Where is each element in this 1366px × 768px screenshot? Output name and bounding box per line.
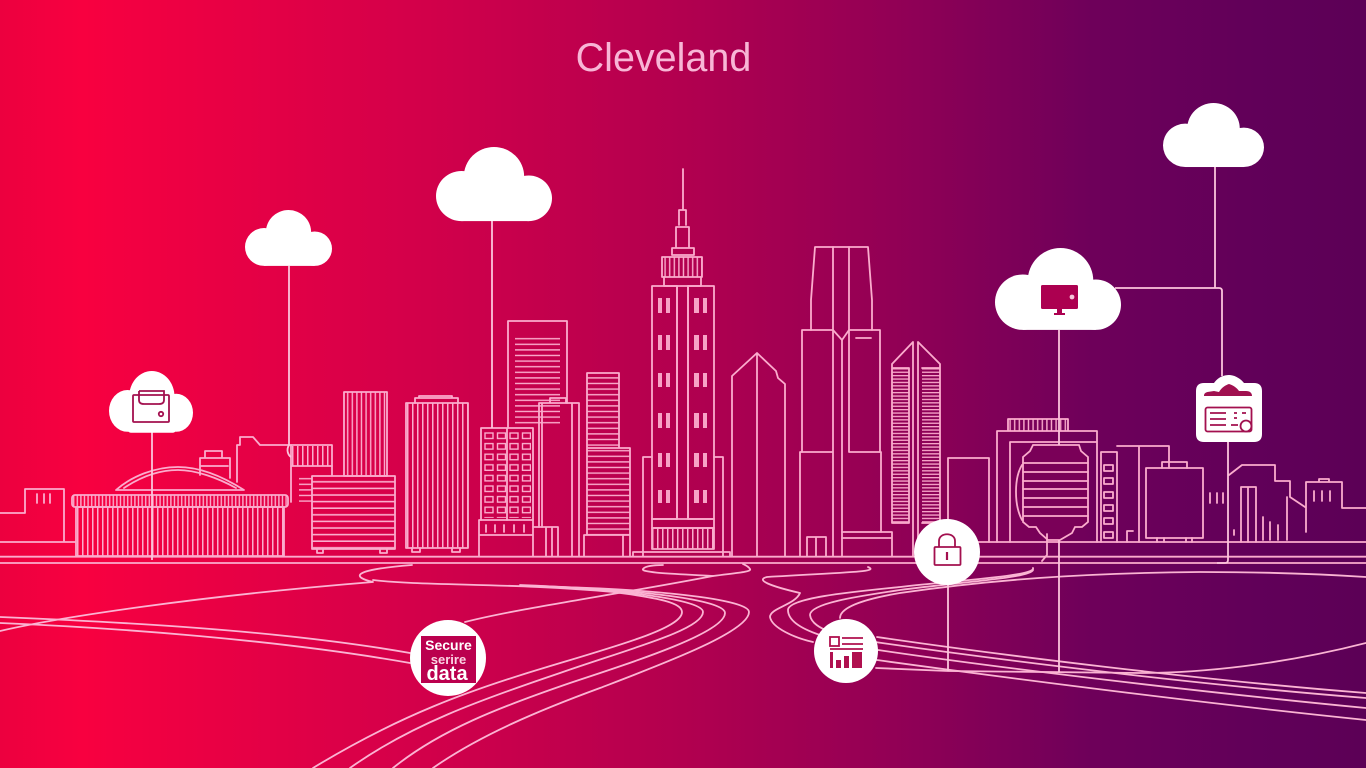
skyline: windowed block and boxy building <box>1101 446 1223 542</box>
skyline: twin peak tower <box>892 342 940 556</box>
secure data label <box>425 637 472 685</box>
icon: padlock <box>934 534 960 565</box>
icon: monitor <box>1041 285 1078 315</box>
card icon badge <box>1196 375 1262 442</box>
icon: bag <box>133 391 169 422</box>
road network <box>0 564 1366 768</box>
skyline: tall ribbed tower <box>406 396 468 552</box>
skyline: central skyscraper with spire <box>633 169 730 556</box>
chart circle <box>814 619 878 683</box>
secure data circle <box>410 620 486 696</box>
skyline: mid-left buildings <box>200 437 332 502</box>
skyline: far-right buildings <box>1229 465 1366 542</box>
cloud 3 <box>436 147 552 221</box>
cloud with bag icon <box>109 371 193 433</box>
secure data label: serire <box>431 652 466 667</box>
lock circle <box>914 519 980 585</box>
connector lines <box>152 167 1228 672</box>
title: Cleveland <box>576 36 751 80</box>
skyline: striped office building <box>508 321 567 428</box>
skyline: stepped striped tower <box>584 373 630 556</box>
skyline: right-hand block <box>948 458 989 542</box>
secure data label: data <box>426 663 468 685</box>
skyline: windowed building <box>479 428 533 556</box>
skyline: pointed building <box>732 353 785 556</box>
cloud with monitor icon <box>995 248 1121 330</box>
skyline: vertical striped tower <box>344 392 387 476</box>
cloud 5 <box>1163 103 1264 167</box>
skyline: octagonal data tower building <box>997 419 1097 561</box>
ground lines <box>0 542 1366 563</box>
skyline: slim tower and podium <box>533 398 579 556</box>
skyline: domed stadium <box>72 467 288 556</box>
secure data label: Secure <box>425 637 472 653</box>
skyline: left low-rise building <box>0 489 75 542</box>
icon: report with bars <box>830 637 863 668</box>
cloud 2 <box>245 210 332 266</box>
skyline: twin-shaft tall tower <box>800 247 892 556</box>
skyline: horizontal striped block <box>312 476 395 553</box>
